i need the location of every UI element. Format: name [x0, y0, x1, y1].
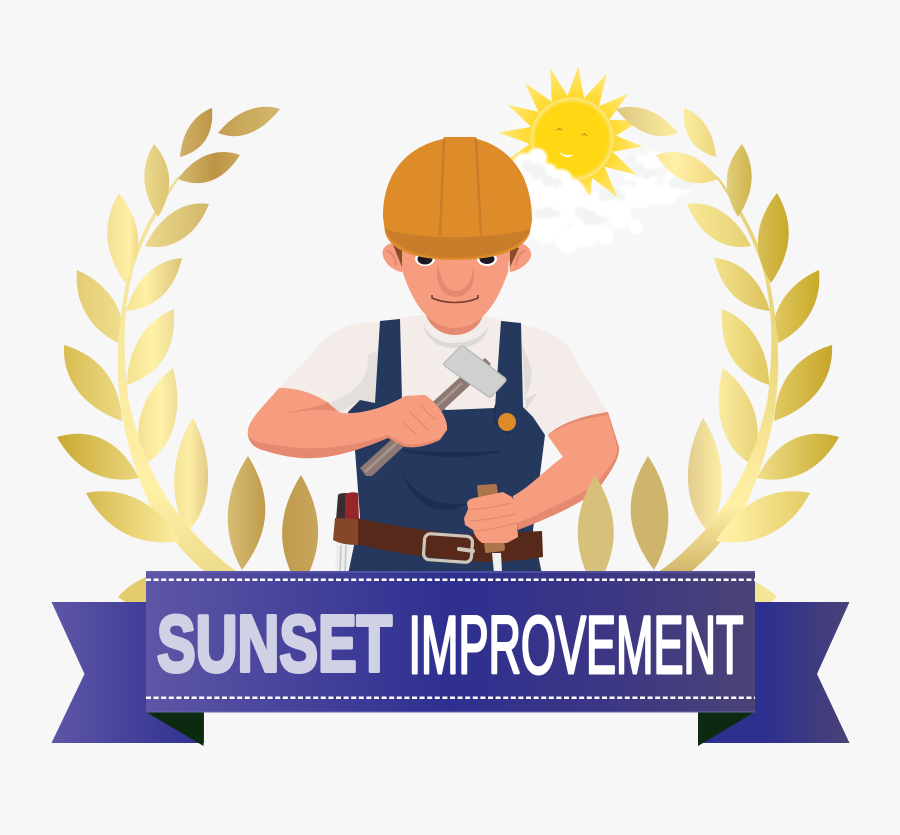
ribbon banner	[52, 571, 850, 746]
leaves: right branch	[616, 107, 839, 604]
stem: left branch	[118, 144, 238, 580]
ribbon main panel	[146, 571, 755, 712]
leaves: left branch	[57, 107, 318, 604]
left laurel branch	[57, 107, 318, 604]
title text	[157, 599, 744, 691]
left arm and hand	[248, 388, 447, 458]
ribbon tail: right	[700, 602, 850, 743]
stitching	[146, 580, 755, 698]
hammer	[360, 346, 506, 476]
mouth	[432, 295, 478, 302]
screwdriver handles	[336, 492, 359, 520]
hard hat	[383, 137, 532, 260]
belt buckle	[423, 533, 473, 563]
cloud in front of the sun	[514, 148, 608, 253]
title text: SUNSET	[157, 599, 392, 688]
ribbon tail: left	[52, 602, 204, 743]
right arm	[513, 412, 619, 530]
chisel-side leaves over arm	[578, 475, 614, 590]
belt strap	[353, 518, 543, 562]
right laurel branch	[616, 107, 839, 604]
ribbon fold: left	[146, 712, 204, 746]
stem: right branch	[658, 144, 778, 580]
chisel	[477, 484, 505, 573]
worker figure	[248, 137, 619, 590]
ribbon fold: right	[698, 712, 755, 746]
icon: smiling sun	[497, 65, 644, 211]
tool belt	[333, 492, 543, 572]
screwdriver blades	[335, 543, 353, 572]
right hand gripping chisel	[464, 492, 521, 543]
button	[498, 413, 516, 431]
cloud behind the sun	[583, 151, 699, 244]
pouch	[333, 518, 358, 545]
nose	[437, 265, 474, 297]
overalls	[348, 319, 545, 574]
shirt	[279, 315, 608, 436]
eyes	[415, 252, 497, 266]
ears, neck and head	[382, 243, 531, 335]
